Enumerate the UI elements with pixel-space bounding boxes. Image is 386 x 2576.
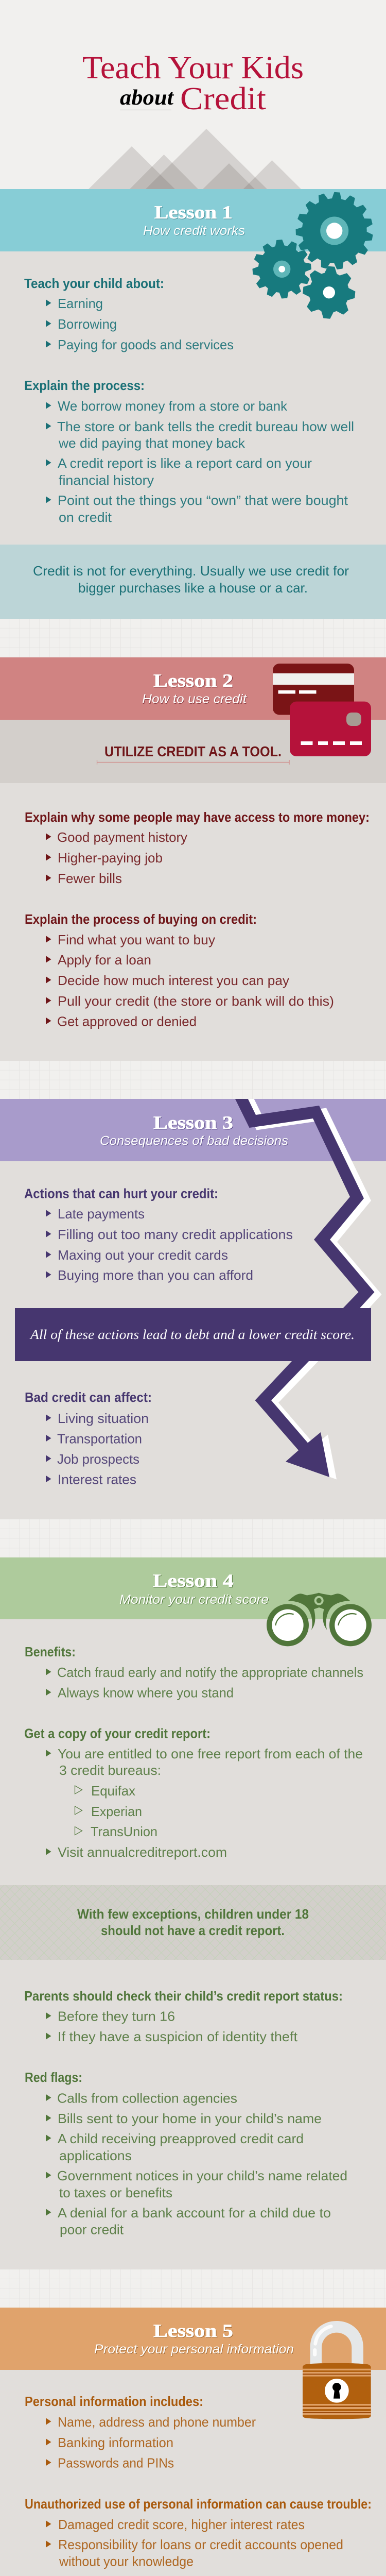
heading: lesson 3: Consequences of bad decisions xyxy=(100,1133,288,1148)
heading: lesson 1: How credit works xyxy=(143,224,245,238)
header panel xyxy=(0,0,386,189)
text block: explain why: Fewer bills xyxy=(58,871,122,886)
icon: padlock xyxy=(303,2321,371,2419)
heading: lesson 4: Monitor your credit score xyxy=(119,1592,269,1607)
text block: personal information includes: Passwords and PINs xyxy=(58,2455,174,2471)
title xyxy=(82,50,304,116)
heading: lesson 3: Lesson 3 xyxy=(153,1112,233,1133)
text block: unauthorized use: Damaged credit score, higher interest rates xyxy=(58,2517,305,2532)
text block: explain the process: we did paying that money back xyxy=(58,435,245,451)
text block: explain the process xyxy=(24,378,354,525)
text block: red flags: applications xyxy=(59,2148,132,2163)
text block: get a copy of your credit report: TransUnion xyxy=(91,1824,157,1839)
text block: benefits: Catch fraud early and notify the appropriate channels xyxy=(57,1665,363,1680)
text block: bad credit can affect: Bad credit can affect: xyxy=(25,1389,152,1405)
callout: utilize credit as a tool xyxy=(97,743,289,765)
heading: lesson 3 xyxy=(100,1112,288,1148)
text block: get a copy of your credit report: Get a copy of your credit report: xyxy=(24,1726,210,1741)
text block: get a copy of your credit report: Equifax xyxy=(91,1783,135,1799)
text block: benefits: Always know where you stand xyxy=(58,1685,234,1701)
text block: explain why xyxy=(25,809,370,886)
heading: lesson 4 xyxy=(119,1570,269,1607)
text block: get a copy of your credit report: Experian xyxy=(91,1804,142,1819)
panel: lesson 4 xyxy=(0,1557,386,1885)
text block: get a copy of your credit report: You are entitled to one free report from each of the xyxy=(58,1746,363,1761)
text block: get a copy of your credit report: 3 credit bureaus: xyxy=(59,1762,161,1778)
text block: actions that can hurt your credit: Maxing out your credit cards xyxy=(58,1247,228,1263)
heading: lesson 2 xyxy=(142,670,247,706)
text block: red flags: poor credit xyxy=(60,2222,124,2237)
panel: lesson 4 continued xyxy=(0,1960,386,2269)
text block: teach your child about: Borrowing xyxy=(58,316,117,332)
text block: bad credit can affect: Interest rates xyxy=(58,1472,136,1487)
heading: lesson 2: How to use credit xyxy=(142,692,247,706)
text block: actions that can hurt your credit: Late payments xyxy=(58,1206,145,1222)
text block: parents should check: Parents should check their child’s credit report status: xyxy=(24,1988,343,2004)
title: Teach Your Kids xyxy=(82,50,304,86)
text block: explain the process: We borrow money from a store or bank xyxy=(58,398,288,414)
panel: lesson 2 xyxy=(0,657,386,1061)
text block: personal information includes: Personal information includes: xyxy=(25,2394,203,2409)
callout: credit is not for everything: Credit is not for everything. Usually we use credit for xyxy=(33,563,349,579)
text block: teach your child about: Earning xyxy=(58,296,103,311)
title: Credit xyxy=(180,81,266,116)
text block: explain the process: on credit xyxy=(59,510,112,525)
text block: red flags: Calls from collection agencies xyxy=(57,2091,237,2106)
icon: credit cards xyxy=(273,664,371,756)
text block: actions that can hurt your credit: Buying more than you can afford xyxy=(58,1267,253,1283)
text block: unauthorized use xyxy=(25,2496,372,2576)
callout: debt and lower credit score: All of these actions lead to debt and a lower credit score. xyxy=(29,1327,355,1342)
text block: process of buying on credit: Get approved or denied xyxy=(57,1014,197,1029)
text block: process of buying on credit xyxy=(25,911,334,1029)
text block: teach your child about: Paying for goods and services xyxy=(58,337,234,352)
text block: red flags xyxy=(25,2070,347,2237)
callout: children under 18: With few exceptions, children under 18 xyxy=(77,1906,309,1922)
text block: personal information includes xyxy=(25,2394,256,2471)
text block: explain the process: Point out the things you “own” that were bought xyxy=(58,493,348,508)
title: about xyxy=(120,86,174,110)
text block: bad credit can affect: Transportation xyxy=(57,1431,142,1447)
callout: children under 18 xyxy=(0,1885,386,1960)
callout: utilize credit as a tool: UTILIZE CREDIT AS A TOOL. xyxy=(104,743,282,759)
callout: debt and lower credit score xyxy=(15,1308,371,1361)
text block: parents should check: If they have a suspicion of identity theft xyxy=(58,2029,298,2044)
text block: actions that can hurt your credit: Actions that can hurt your credit: xyxy=(24,1186,218,1201)
heading: lesson 1 xyxy=(143,202,245,238)
heading: lesson 2: Lesson 2 xyxy=(153,670,233,691)
panel: lesson 1 xyxy=(0,189,386,545)
text block: explain the process: The store or bank tells the credit bureau how well xyxy=(57,419,354,434)
text block: process of buying on credit: Apply for a loan xyxy=(58,952,151,968)
text block: explain the process: A credit report is like a report card on your xyxy=(58,455,312,471)
text block: parents should check xyxy=(24,1988,343,2044)
text block: bad credit can affect: Job prospects xyxy=(57,1451,139,1467)
text block: teach your child about xyxy=(24,276,234,352)
text block: parents should check: Before they turn 16 xyxy=(58,2009,175,2024)
text block: bad credit can affect xyxy=(25,1389,152,1487)
text block: get a copy of your credit report: Visit annualcreditreport.com xyxy=(58,1844,227,1860)
text block: red flags: A child receiving preapproved credit card xyxy=(58,2131,304,2146)
text block: personal information includes: Name, address and phone number xyxy=(58,2414,256,2430)
text block: red flags: to taxes or benefits xyxy=(59,2185,172,2200)
text block: red flags: A denial for a bank account for a child due to xyxy=(58,2205,331,2221)
callout: children under 18: should not have a credit report. xyxy=(101,1923,285,1938)
heading: lesson 5: Lesson 5 xyxy=(153,2320,233,2341)
callout: credit is not for everything xyxy=(0,545,386,619)
callout: credit is not for everything: bigger purchases like a house or a car. xyxy=(78,580,308,596)
text block: explain why: Good payment history xyxy=(57,829,187,845)
text block: process of buying on credit: Explain the process of buying on credit: xyxy=(25,911,257,927)
heading: lesson 1: Lesson 1 xyxy=(154,202,233,223)
heading: lesson 5: Protect your personal information xyxy=(94,2342,294,2357)
text block: actions that can hurt your credit: Filling out too many credit applications xyxy=(58,1227,293,1242)
heading: lesson 5 xyxy=(94,2320,294,2357)
text block: unauthorized use: Responsibility for loans or credit accounts opened xyxy=(58,2537,343,2552)
text block: unauthorized use: without your knowledge xyxy=(59,2553,194,2569)
text block: red flags: Government notices in your child’s name related xyxy=(57,2168,347,2183)
text block: actions that can hurt your credit xyxy=(24,1186,293,1283)
heading: lesson 4: Lesson 4 xyxy=(153,1570,234,1591)
text block: get a copy of your credit report xyxy=(24,1726,363,1860)
panel: lesson 3 xyxy=(0,1094,386,1519)
text block: process of buying on credit: Find what you want to buy xyxy=(58,932,215,947)
text block: red flags: Bills sent to your home in your child’s name xyxy=(58,2111,322,2126)
text block: teach your child about: Teach your child about: xyxy=(24,276,164,291)
icon: gears xyxy=(252,192,373,319)
text block: personal information includes: Banking information xyxy=(58,2435,173,2450)
text block: bad credit can affect: Living situation xyxy=(58,1411,149,1426)
icon: binoculars xyxy=(267,1593,372,1646)
text block: explain the process: Explain the process: xyxy=(24,378,145,393)
text block: explain the process: financial history xyxy=(59,472,154,488)
icon: mountains xyxy=(89,129,301,189)
text block: red flags: Red flags: xyxy=(25,2070,82,2085)
text block: benefits: Benefits: xyxy=(25,1644,76,1659)
text block: process of buying on credit: Pull your credit (the store or bank will do this) xyxy=(58,993,334,1009)
text block: process of buying on credit: Decide how much interest you can pay xyxy=(58,973,289,988)
panel: lesson 5 xyxy=(0,2308,386,2576)
text block: explain why: Higher-paying job xyxy=(58,850,163,866)
arrow: falling zigzag xyxy=(233,1094,382,1480)
text block: benefits xyxy=(25,1644,363,1701)
